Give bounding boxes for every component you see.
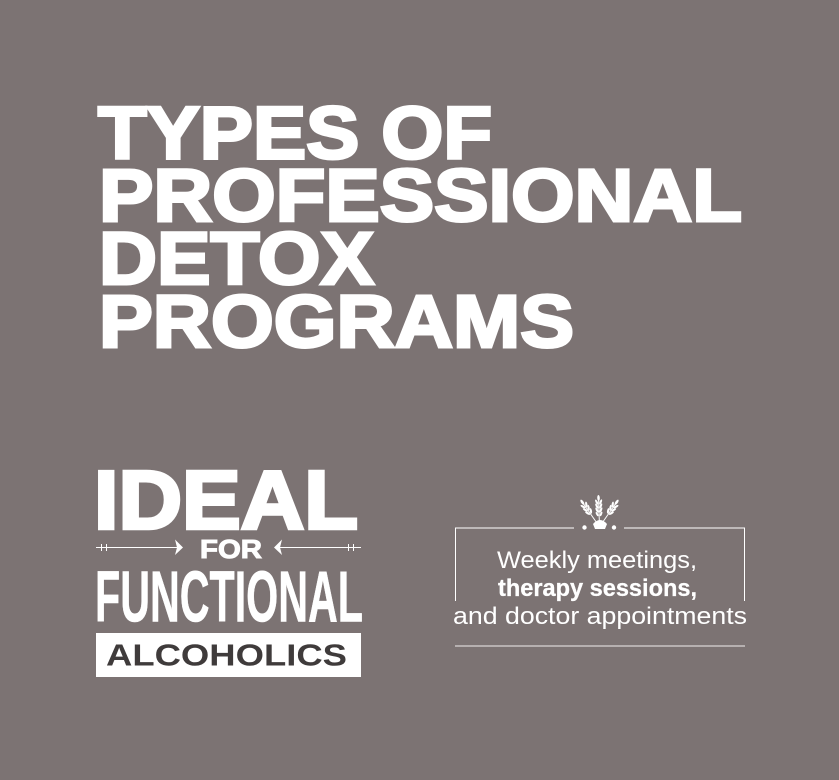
title: [98, 92, 742, 363]
callout text: [453, 547, 747, 630]
title: PROFESSIONAL: [99, 154, 742, 237]
arrow: right: [274, 540, 361, 555]
title: TYPES OF: [98, 92, 492, 174]
callout frame: [455, 528, 745, 646]
icon: wheat: [577, 495, 622, 530]
callout text: therapy sessions,: [498, 575, 697, 602]
heading: for: FOR: [200, 534, 262, 564]
callout: weekly meetings: [453, 495, 747, 646]
heading: ideal: IDEAL: [94, 454, 358, 546]
stalk: left: [577, 497, 602, 528]
stalk: centre: [594, 495, 604, 526]
cluster at base: [593, 520, 607, 529]
callout text: Weekly meetings,: [497, 547, 697, 574]
heading: functional: FUNCTIONAL: [95, 558, 363, 638]
label bar: alcoholics: ALCOHOLICS: [106, 638, 347, 672]
stalk: right: [597, 497, 622, 528]
title: PROGRAMS: [99, 280, 574, 363]
badge: ideal for functional alcoholics: [94, 454, 363, 677]
arrow: left: [96, 540, 183, 555]
callout text: and doctor appointments: [453, 603, 747, 630]
label bar: alcoholics: [96, 633, 361, 677]
title: DETOX: [99, 217, 374, 300]
